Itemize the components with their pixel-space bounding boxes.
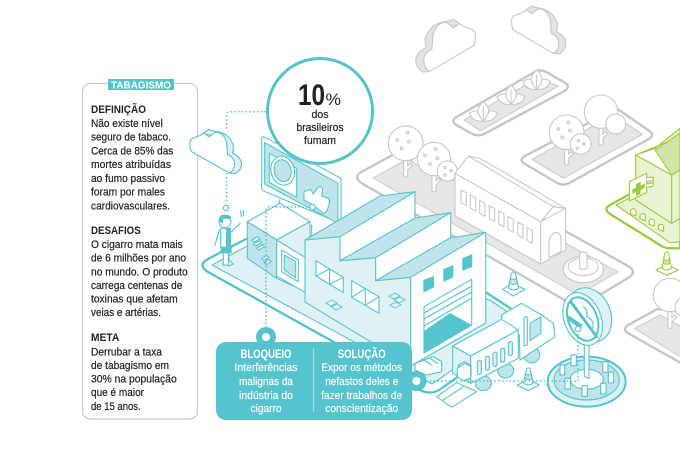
solução text: Expor os métodos (321, 362, 403, 374)
text block: meta: META (91, 332, 119, 344)
text block: meta (91, 332, 177, 413)
grey block bottom right (625, 278, 680, 370)
factory left wall (305, 237, 411, 366)
teal cone top (503, 272, 525, 296)
trees on main block (388, 126, 457, 192)
solução text: nefastos deles e (325, 376, 398, 388)
green cone (656, 265, 678, 275)
fountain (563, 256, 603, 283)
roller door (424, 279, 472, 353)
teal cloud (190, 130, 242, 174)
background: grey city blocks (357, 6, 680, 370)
callout: 10%: 10 (298, 79, 325, 112)
tree block (522, 95, 652, 185)
sign disk (559, 281, 620, 349)
text block: meta: 30% na população (91, 374, 177, 386)
text block: desafios: carrega centenas de (91, 280, 182, 292)
text block: desafios: toxinas que afetam (91, 294, 178, 306)
text block: desafios: veias e artérias. (91, 307, 161, 319)
text block: desafios: no mundo. O produto (91, 266, 188, 278)
text block: meta: de tabagismo em (91, 360, 169, 372)
icon: thumbs up (304, 187, 329, 213)
text block: meta: de 15 anos. (91, 401, 141, 413)
solução text: conscientização (325, 403, 398, 415)
panel: tabagismo (82, 79, 198, 419)
text block: definição: seguro de tabaco. (91, 132, 171, 144)
small building (247, 203, 310, 293)
callout: 10%: dos (312, 109, 329, 121)
text block: definição: ao fumo passivo (91, 173, 165, 185)
bricks (326, 300, 342, 310)
solução text: SOLUÇÃO (338, 348, 386, 361)
text block: desafios (91, 225, 188, 319)
solução text (321, 348, 403, 415)
box (458, 362, 471, 379)
text block: meta: que é maior (91, 387, 144, 399)
text block: definição: Não existe nível (91, 118, 163, 130)
grey cloud right (512, 6, 566, 54)
text block: definição: DEFINIÇÃO (91, 103, 146, 116)
bloqueio text (234, 349, 298, 415)
ramp and boxes (415, 357, 477, 407)
text block: meta: Derrubar a taxa (91, 346, 163, 358)
bloqueio text: cigarro (250, 403, 282, 415)
bloqueio text: Interferências (234, 362, 298, 374)
callout: 10%: brasileiros (296, 122, 344, 134)
text block: definição: mortes atribuídas (91, 159, 171, 171)
sign base (548, 357, 626, 407)
factory right wall (411, 232, 486, 366)
callout: 10%: fumam (304, 135, 336, 147)
bloqueio text: indústria do (239, 390, 293, 402)
text block: definição (91, 103, 174, 212)
roof bands (305, 192, 415, 240)
callout: 10%: % (326, 90, 341, 109)
text block: definição: cardiovasculares. (91, 200, 170, 212)
callout: 10% (268, 58, 372, 164)
factory windows (316, 261, 343, 293)
trailer (453, 319, 518, 356)
text block: desafios: DESAFIOS (91, 225, 141, 237)
right wall square windows (423, 254, 472, 293)
billboard (262, 137, 341, 237)
callout: bloqueio e solução (216, 327, 426, 420)
panel tag: TABAGISMO (111, 80, 171, 92)
bloqueio text: BLOQUEIO (240, 349, 292, 361)
main grey block (357, 145, 633, 305)
text block: desafios: O cigarro mata mais (91, 239, 183, 251)
no smoking sign (548, 281, 626, 407)
bloqueio text: malignas da (239, 376, 294, 388)
green hospital block (606, 128, 680, 275)
cone bottom (517, 379, 539, 391)
cab (502, 303, 555, 360)
solução text: fazer trabalhos de (321, 390, 402, 402)
teal factory platform (202, 238, 528, 393)
text block: definição: foram por males (91, 186, 165, 198)
wheels (498, 363, 514, 378)
dotted connectors (223, 112, 581, 381)
grey long building (455, 156, 603, 283)
factory (305, 192, 486, 366)
grey cloud left (416, 19, 476, 72)
truck (453, 303, 555, 391)
text block: desafios: de 6 milhões por ano (91, 252, 186, 264)
text block: definição: Cerca de 85% das (91, 146, 174, 158)
tobacco worker (215, 210, 243, 266)
plant block (453, 70, 568, 135)
